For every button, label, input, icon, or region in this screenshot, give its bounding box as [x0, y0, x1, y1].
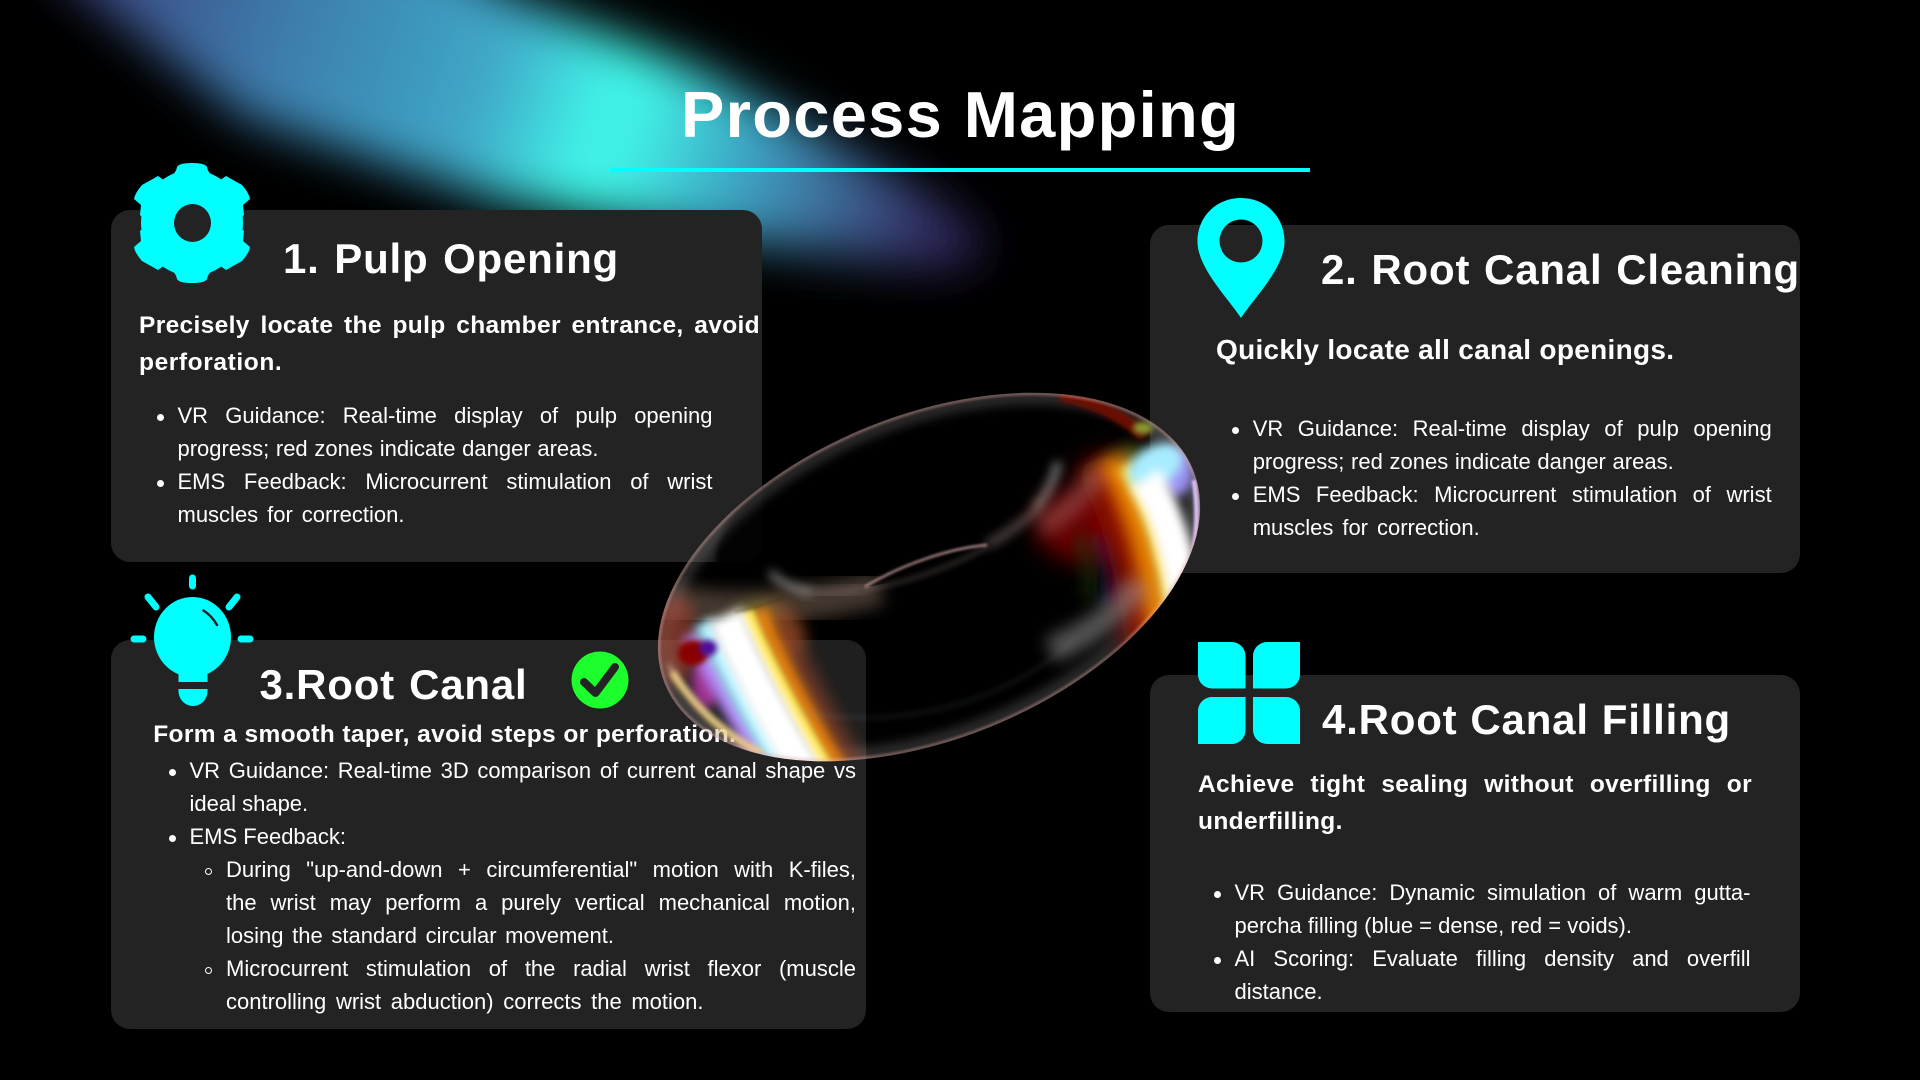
goal statement: pulp opening — [139, 312, 760, 376]
bullet list: root canal — [169, 758, 856, 1014]
panel: 3. root canal — [111, 640, 866, 1029]
heading: root canal cleaning: 2. Root Canal Cleaning — [1321, 246, 1800, 293]
icon: gear — [134, 163, 250, 283]
bullet list: root canal: the wrist may perform a purely vertical mechanical motion, — [226, 890, 856, 915]
torus: lower-left rainbow band — [654, 588, 880, 790]
bullet list: pulp opening: progress; red zones indicate danger areas. — [178, 436, 598, 461]
torus: rim — [658, 392, 1200, 762]
bullet list: root canal filling: AI Scoring: Evaluate filling density and overfill — [1234, 946, 1750, 971]
bullet list: root canal cleaning: EMS Feedback: Microcurrent stimulation of wrist — [1253, 482, 1772, 507]
glass torus — [658, 392, 1200, 762]
bullet list: root canal cleaning: VR Guidance: Real-time display of pulp opening — [1253, 416, 1772, 441]
icon: green check badge — [572, 652, 628, 708]
goal statement: pulp opening: perforation. — [139, 349, 282, 376]
bullet list: root canal filling: distance. — [1234, 979, 1323, 1004]
bullet list: pulp opening: EMS Feedback: Microcurrent stimulation of wrist — [178, 469, 712, 494]
bullet list: pulp opening — [157, 403, 712, 527]
heading: root canal: 3.Root Canal — [260, 660, 528, 708]
bullet list: root canal filling: percha filling (blue = dense, red = voids). — [1234, 913, 1632, 938]
bullet list: pulp opening: muscles for correction. — [178, 502, 404, 527]
bullet list: pulp opening: VR Guidance: Real-time display of pulp opening — [178, 403, 712, 428]
bullet list: root canal cleaning: muscles for correction. — [1253, 515, 1480, 540]
torus: upper dark lobe — [714, 486, 762, 562]
panel: 2. root canal cleaning — [1150, 225, 1800, 573]
bullet list: root canal filling: VR Guidance: Dynamic simulation of warm gutta- — [1234, 880, 1750, 905]
goal statement: root canal filling — [1198, 771, 1752, 835]
bullet list: root canal cleaning — [1232, 416, 1772, 540]
torus: inner glow — [658, 392, 1200, 760]
title underline — [610, 168, 1310, 172]
bullet list: root canal filling — [1214, 880, 1750, 1004]
panel: 1. pulp opening — [111, 210, 762, 562]
bullet list: root canal: EMS Feedback: — [190, 824, 346, 849]
title: Process Mapping — [681, 78, 1240, 151]
icon: location pin — [1197, 198, 1284, 318]
panel: 4. root canal filling — [1150, 675, 1800, 1012]
goal statement: root canal filling: Achieve tight sealing without overfilling or — [1198, 771, 1752, 798]
bullet list: root canal cleaning: progress; red zones indicate danger areas. — [1253, 449, 1674, 474]
goal statement: root canal filling: underfilling. — [1198, 808, 1343, 835]
bullet list: root canal: ideal shape. — [190, 791, 308, 816]
goal statement: root canal: Form a smooth taper, avoid steps or perforation. — [153, 720, 736, 748]
bullet list: root canal: controlling wrist abduction) corrects the motion. — [226, 989, 704, 1014]
goal statement: root canal cleaning: Quickly locate all canal openings. — [1216, 334, 1674, 365]
bullet list: root canal: losing the standard circular movement. — [226, 923, 614, 948]
torus: inner lip and hole — [770, 462, 1075, 718]
bullet list: root canal: VR Guidance: Real-time 3D comparison of current canal shape vs — [190, 758, 856, 783]
heading: pulp opening: 1. Pulp Opening — [283, 235, 619, 282]
torus: right rainbow band — [1035, 395, 1197, 650]
goal statement: pulp opening: Precisely locate the pulp chamber entrance, avoid — [139, 312, 760, 339]
icon: four-petal grid — [1198, 642, 1300, 744]
icon: light bulb — [130, 574, 254, 706]
heading: root canal filling: 4.Root Canal Filling — [1322, 696, 1731, 742]
bullet list: root canal: During "up-and-down + circumferential" motion with K-files, — [226, 857, 856, 882]
bullet list: root canal: Microcurrent stimulation of the radial wrist flexor (muscle — [226, 956, 856, 981]
